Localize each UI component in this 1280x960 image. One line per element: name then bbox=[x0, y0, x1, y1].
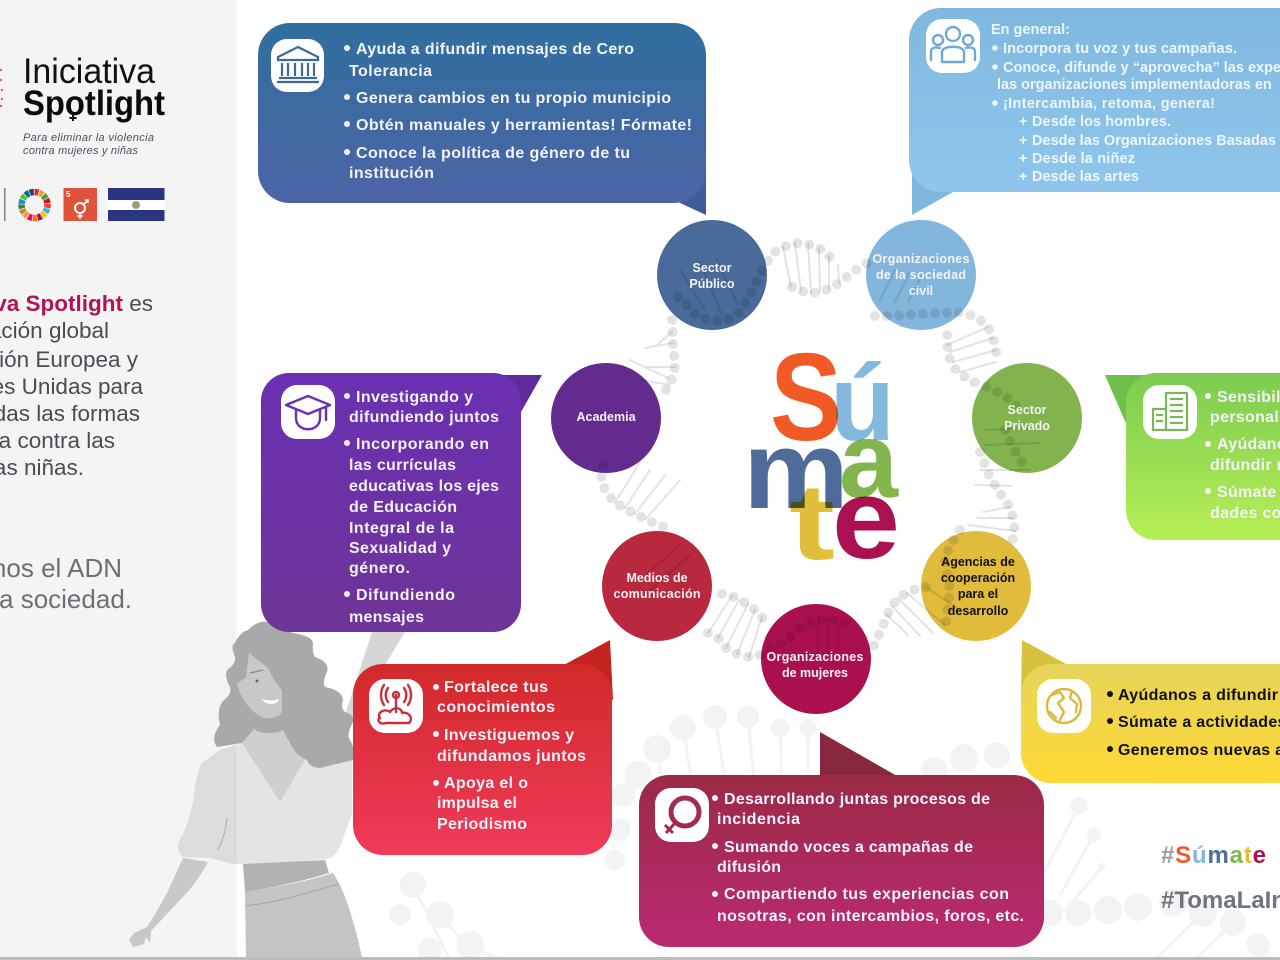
text: Academia actions: Integral de la bbox=[349, 520, 454, 537]
text: general actions: En general: bbox=[991, 22, 1070, 38]
text: general actions: + bbox=[1019, 169, 1027, 185]
text: Sector Privado actions: personal bbox=[1210, 409, 1279, 426]
centre word: Súmate: a bbox=[839, 399, 899, 520]
text: Academia actions: género. bbox=[349, 560, 410, 577]
label: Organizaciones de la sociedad civil: de la sociedad bbox=[876, 268, 966, 282]
text: Medios actions: Apoya el o bbox=[444, 775, 528, 792]
text: Medios actions: Periodismo bbox=[437, 816, 527, 833]
centre word: Súmate: e bbox=[832, 456, 900, 583]
label: Sector Público bbox=[689, 261, 735, 291]
centre word: Súmate: m bbox=[743, 409, 849, 532]
text: Academia actions: de Educación bbox=[349, 499, 457, 516]
label: Sector Público: Sector bbox=[693, 261, 732, 275]
text: general actions: Incorpora tu voz y tus campañas. bbox=[1003, 41, 1237, 57]
centre word: Súmate: S bbox=[770, 329, 842, 467]
centre word: Súmate: ú bbox=[830, 342, 895, 463]
text: general actions: ¡Intercambia, retoma, genera! bbox=[1003, 96, 1215, 112]
text: Agencias actions: Ayúdanos a difundir bbox=[1118, 687, 1278, 704]
text: Organizaciones de mujeres actions: Desarrollando juntas procesos de bbox=[724, 791, 990, 808]
hashtag: #Súmate: #Súmate bbox=[1161, 842, 1266, 869]
text: Organizaciones de mujeres actions: Compartiendo tus experiencias con bbox=[724, 886, 1009, 903]
label: Medios de comunicación: comunicación bbox=[614, 587, 700, 601]
panel: Sector Público bubble bbox=[258, 23, 706, 215]
icon: broadcast antenna and cloud bbox=[369, 679, 423, 733]
text: general actions: Desde los hombres. bbox=[1032, 114, 1171, 130]
text: Sector Público actions: Obtén manuales y herramientas! Fórmate! bbox=[356, 117, 692, 134]
text: Organizaciones de mujeres actions: Sumando voces a campañas de bbox=[724, 839, 973, 856]
label: Organizaciones de mujeres: de mujeres bbox=[782, 666, 848, 680]
text: Academia actions: Incorporando en bbox=[356, 436, 489, 453]
label: Organizaciones de mujeres bbox=[766, 650, 864, 680]
text: Sector Público actions: Conoce la política de género de tu bbox=[356, 145, 630, 162]
label: Medios de comunicación: Medios de bbox=[626, 571, 688, 585]
text: Academia actions: mensajes bbox=[349, 609, 424, 626]
text: general actions: Desde la niñez bbox=[1032, 151, 1135, 167]
text: Academia actions: Investigando y bbox=[356, 389, 473, 406]
text: Sector Público actions: Tolerancia bbox=[349, 63, 432, 80]
centre word: Súmate: t bbox=[789, 461, 835, 582]
text: Sector Privado actions bbox=[1205, 389, 1280, 522]
text: general actions: + bbox=[1019, 151, 1027, 167]
tagline bbox=[0, 553, 132, 614]
text: Organizaciones de mujeres actions: incidencia bbox=[717, 811, 800, 828]
logos row: SDG wheel, SDG 5, El Salvador flag: 5 bbox=[66, 190, 71, 199]
label: Agencias de cooperación para el desarrollo: cooperación bbox=[941, 571, 1015, 585]
label: Agencias de cooperación para el desarrollo bbox=[941, 555, 1015, 618]
text: Sector Público actions: Ayuda a difundir mensajes de Cero bbox=[356, 41, 634, 58]
text: general actions bbox=[991, 22, 1280, 185]
text: Academia actions bbox=[344, 389, 499, 626]
label: Agencias de cooperación para el desarrollo: Agencias de bbox=[941, 555, 1015, 569]
panel: Organizaciones de la sociedad civil bubble bbox=[909, 8, 1280, 215]
label: Organizaciones de mujeres: Organizaciones bbox=[766, 650, 864, 664]
text: Organizaciones de mujeres actions: nosotras, con intercambios, foros, etc. bbox=[717, 908, 1024, 925]
panel: Agencias de cooperación bubble bbox=[1021, 640, 1280, 783]
icon: graduation cap bbox=[281, 385, 335, 439]
text: Medios actions: impulsa el bbox=[437, 795, 517, 812]
left sidebar panel bbox=[0, 0, 237, 957]
label: Sector Privado: Privado bbox=[1004, 419, 1050, 433]
text: Academia actions: difundiendo juntos bbox=[349, 409, 499, 426]
icon: globe bbox=[1037, 679, 1091, 733]
text: Academia actions: Sexualidad y bbox=[349, 540, 451, 557]
centre word: Súmate bbox=[743, 329, 900, 583]
label: Organizaciones de la sociedad civil bbox=[872, 252, 970, 298]
text: Academia actions: educativas los ejes bbox=[349, 478, 499, 495]
icon: office buildings bbox=[1143, 385, 1197, 439]
panel: Organizaciones de mujeres bubble bbox=[639, 732, 1044, 947]
text: general actions: Desde las Organizaciones Basadas bbox=[1032, 133, 1276, 149]
pale DNA background at bottom bbox=[389, 705, 1270, 960]
icon: female symbol bbox=[655, 788, 709, 842]
DNA ring bbox=[601, 243, 1040, 660]
label: Organizaciones de la sociedad civil: Organizaciones bbox=[872, 252, 970, 266]
circle labels bbox=[576, 252, 1050, 680]
icon: group of people bbox=[926, 19, 980, 73]
label: Sector Privado: Sector bbox=[1008, 403, 1047, 417]
woman illustration bbox=[129, 622, 405, 957]
panel: Academia bubble bbox=[261, 373, 542, 632]
logo: Iniciativa Spotlight: Para eliminar la violencia bbox=[23, 132, 154, 144]
logo: Iniciativa Spotlight: Iniciativa bbox=[23, 52, 156, 91]
text: general actions: Desde las artes bbox=[1032, 169, 1139, 185]
text: Agencias actions bbox=[1107, 687, 1280, 759]
text: Academia actions: Difundiendo bbox=[356, 587, 455, 604]
text: Medios actions: conocimientos bbox=[437, 699, 555, 716]
panel: Medios de comunicación bubble bbox=[353, 640, 613, 855]
label: Agencias de cooperación para el desarrollo: desarrollo bbox=[948, 604, 1009, 618]
intro text bbox=[0, 291, 153, 480]
text: Medios actions: Fortalece tus bbox=[444, 679, 548, 696]
logo: Iniciativa Spotlight bbox=[0, 52, 165, 157]
text: Sector Público actions bbox=[344, 41, 692, 182]
text: general actions: + bbox=[1019, 114, 1027, 130]
logos row: SDG wheel, SDG 5, El Salvador flag bbox=[4, 188, 164, 221]
panel: Sector Privado bubble bbox=[1105, 373, 1280, 540]
text: Sector Público actions: institución bbox=[349, 165, 434, 182]
label: Academia: Academia bbox=[576, 410, 637, 424]
icon: institution building bbox=[271, 39, 324, 92]
label: Sector Privado bbox=[1004, 403, 1050, 433]
text: general actions: + bbox=[1019, 133, 1027, 149]
logo: Iniciativa Spotlight: Spotlight bbox=[23, 84, 165, 123]
bottom edge bar bbox=[0, 957, 1280, 960]
label: Agencias de cooperación para el desarrollo: para el bbox=[958, 587, 998, 601]
text: Medios actions: difundamos juntos bbox=[437, 748, 586, 765]
text: Sector Público actions: Genera cambios en tu propio municipio bbox=[356, 90, 671, 107]
text: general actions: las organizaciones implementadoras en bbox=[997, 77, 1272, 93]
text: Organizaciones de mujeres actions bbox=[712, 791, 1024, 925]
text: Organizaciones de mujeres actions: difusión bbox=[717, 859, 781, 876]
label: Sector Público: Público bbox=[689, 277, 735, 291]
label: Medios de comunicación bbox=[614, 571, 700, 601]
sector circles bbox=[551, 220, 1082, 714]
label: Organizaciones de la sociedad civil: civil bbox=[909, 284, 933, 298]
text: Medios actions bbox=[433, 679, 586, 833]
text: Medios actions: Investiguemos y bbox=[444, 727, 574, 744]
text: Academia actions: las currículas bbox=[349, 457, 456, 474]
logo: Iniciativa Spotlight: contra mujeres y niñas bbox=[23, 145, 138, 157]
